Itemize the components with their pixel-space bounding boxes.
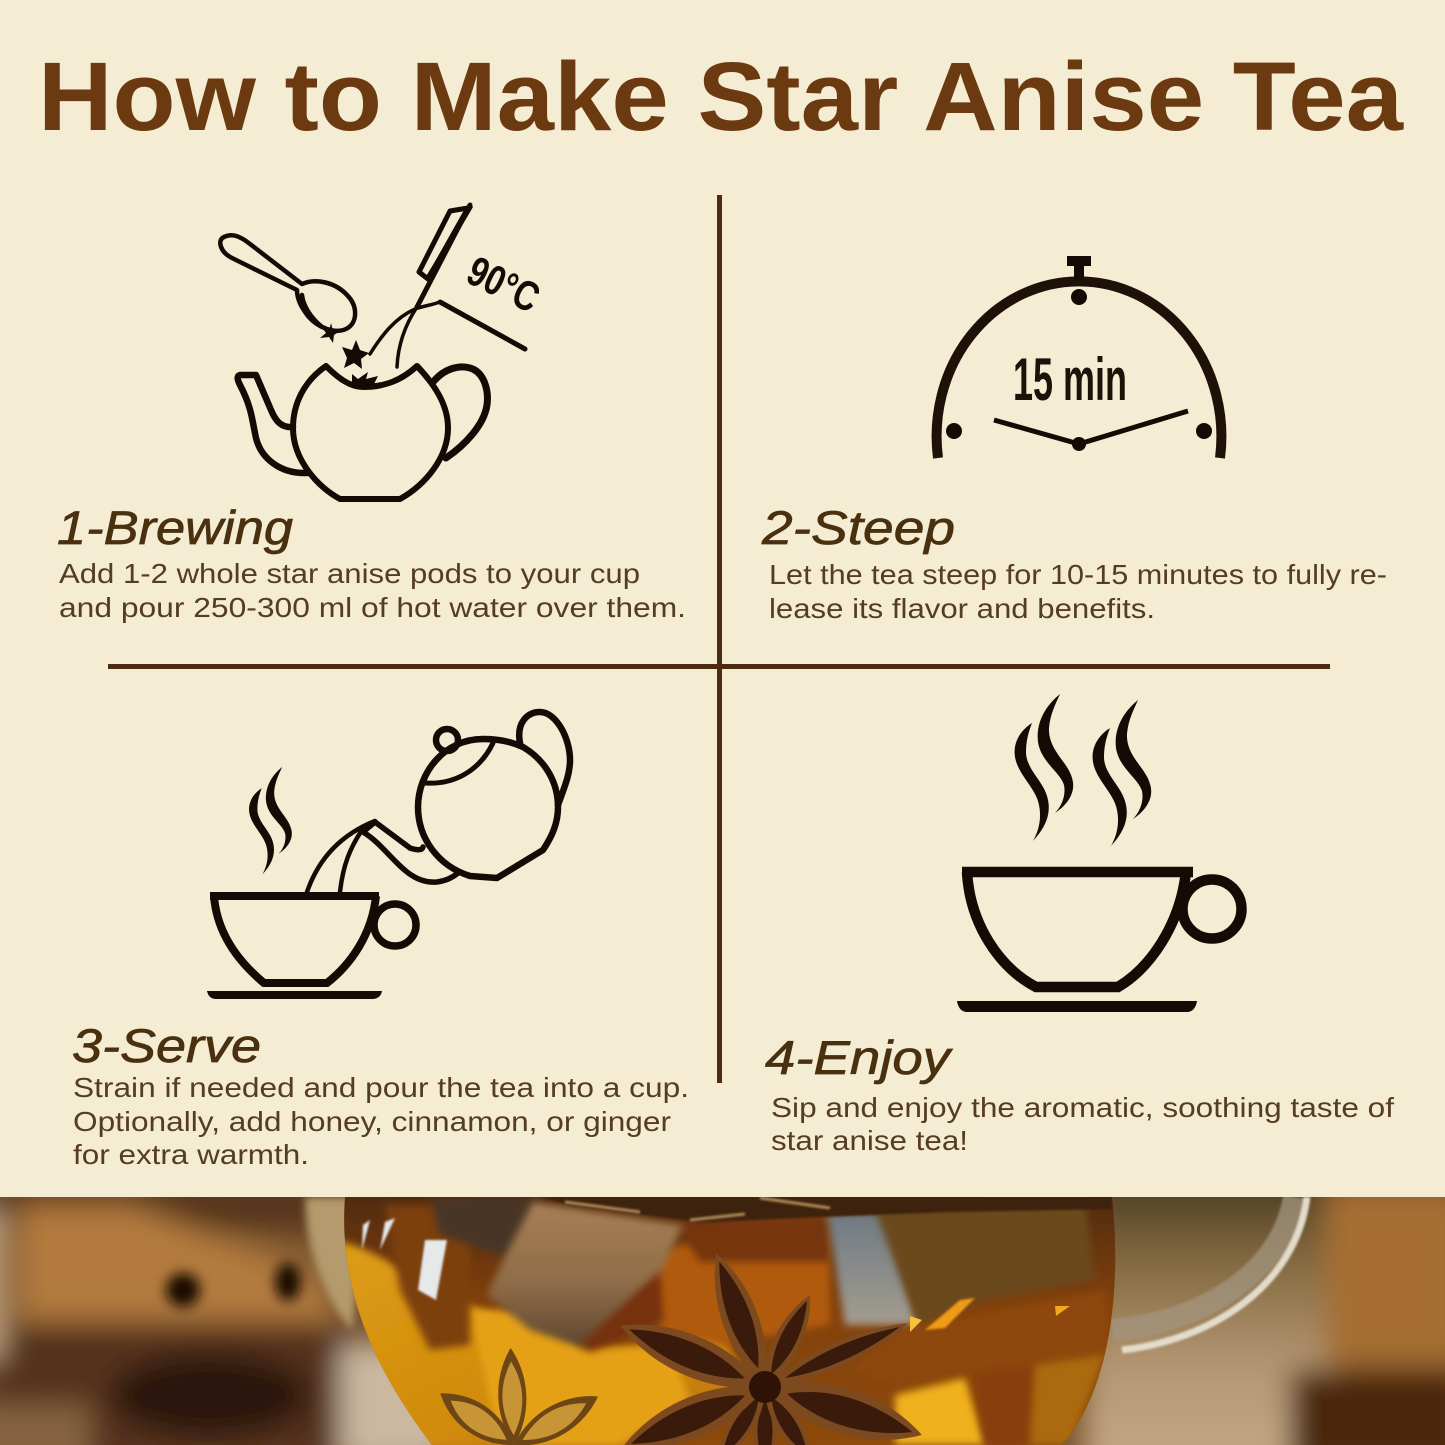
heading: 2-Steep: 2-Steep: [761, 501, 955, 554]
tea in glass: [344, 1197, 1116, 1445]
body text: steep: lease its flavor and benefits.: [769, 593, 1155, 624]
teapot lid line: [425, 743, 493, 783]
teapot spout: [363, 822, 458, 882]
teapot knob: [436, 729, 458, 751]
glass rim edge: [305, 1197, 365, 1330]
bright yellow lower right: [895, 1378, 985, 1445]
orange mid zone: [653, 1215, 830, 1345]
label: 15 min: 15 min: [1013, 346, 1127, 413]
thermometer: [417, 205, 470, 307]
timer dots: [946, 289, 1212, 451]
small star anise falling: [320, 323, 340, 343]
body text: brewing: and pour 250-300 ml of hot water over them.: [59, 592, 686, 623]
body text: serve: Optionally, add honey, cinnamon, or ginger: [73, 1106, 671, 1137]
saucer: [207, 991, 382, 999]
pouring curves: [370, 302, 440, 354]
pouring tea streams: [307, 821, 375, 892]
dark texture above leaf: [430, 1198, 540, 1258]
icon: teapot with spoon, star anise and thermometer: [220, 204, 547, 499]
main star anise: [613, 1247, 929, 1445]
horizontal divider: [108, 664, 1330, 669]
spoon: [220, 235, 355, 331]
right leaf: [873, 1200, 1095, 1325]
small golden star anise: [432, 1348, 606, 1445]
teapot body: [293, 366, 448, 499]
glass highlights: [362, 1218, 447, 1300]
body text: serve: for extra warmth.: [73, 1139, 309, 1170]
panel: step 2 steep: [761, 256, 1387, 624]
icon: teapot pouring into cup: [207, 712, 570, 999]
photo: glass of star anise tea: [0, 1170, 1445, 1445]
title: How to Make Star Anise Tea: [38, 42, 1404, 151]
steam: [249, 767, 292, 874]
body text: enjoy: Sip and enjoy the aromatic, soothing taste of: [771, 1092, 1394, 1123]
cup handle: [1182, 880, 1242, 938]
grey reflection: [827, 1212, 918, 1325]
body text: enjoy: [771, 1092, 1394, 1156]
top band of glass: [540, 1197, 1112, 1222]
body text: brewing: [59, 558, 686, 623]
vertical divider: [717, 195, 722, 1083]
body text: serve: Strain if needed and pour the tea into a cup.: [73, 1072, 689, 1103]
body text: steep: [769, 559, 1387, 624]
heading: 1-Brewing: 1-Brewing: [57, 501, 293, 554]
cup: [962, 872, 1193, 987]
saucer: [957, 1001, 1197, 1012]
cup handle: [374, 904, 416, 946]
body text: brewing: Add 1-2 whole star anise pods to your cup: [59, 558, 640, 589]
teapot handle: [519, 712, 570, 805]
panel: step 1 brewing: [57, 204, 686, 623]
dark streak left: [385, 1205, 470, 1350]
body text: serve: [73, 1072, 689, 1170]
steam: [1015, 694, 1151, 846]
timer arc: [937, 281, 1221, 458]
grey leaf: [487, 1202, 683, 1348]
heading: 4-Enjoy: 4-Enjoy: [765, 1031, 953, 1084]
cup: [210, 896, 379, 983]
label: 90 degrees: 90°C: [460, 247, 547, 322]
blurred dark spots: [166, 1263, 301, 1307]
golden liquid: [330, 1240, 760, 1445]
glass handle: [1112, 1197, 1307, 1350]
icon: timer: [937, 256, 1221, 458]
body text: enjoy: star anise tea!: [771, 1125, 968, 1156]
panel: step 3 serve: [72, 712, 689, 1170]
red-brown bark: [580, 1272, 663, 1352]
teapot spout: [238, 375, 307, 473]
body text: steep: Let the tea steep for 10-15 minutes to fully re-: [769, 559, 1387, 590]
panel: step 4 enjoy: [765, 694, 1394, 1156]
pods in pot: [352, 372, 378, 385]
star anise: [342, 340, 369, 369]
heading: 3-Serve: 3-Serve: [72, 1019, 261, 1072]
tilted teapot body: [418, 739, 558, 878]
icon: steaming cup: [957, 694, 1242, 1012]
blurred background: [0, 1170, 1445, 1445]
timer hands: [994, 411, 1188, 444]
teapot handle: [434, 367, 487, 458]
timer knob: [1067, 256, 1091, 280]
